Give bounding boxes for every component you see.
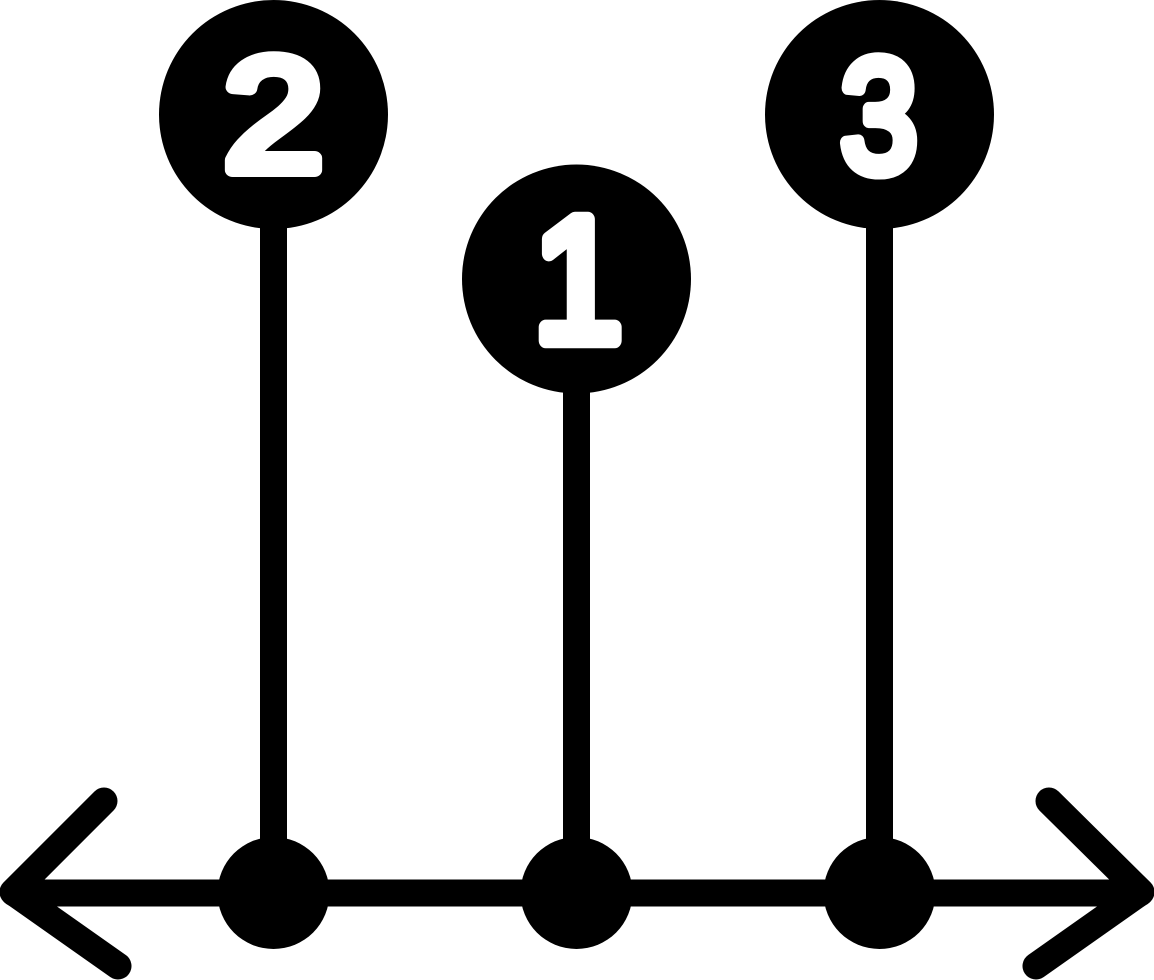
marker 3 [765, 0, 994, 949]
marker 2: 2 [224, 25, 323, 204]
marker 3: 3 [841, 26, 917, 205]
marker 1: 1 [534, 181, 622, 378]
horizontal double-headed arrow [13, 801, 1141, 966]
marker 1 [462, 164, 691, 949]
marker 2 [159, 0, 388, 949]
